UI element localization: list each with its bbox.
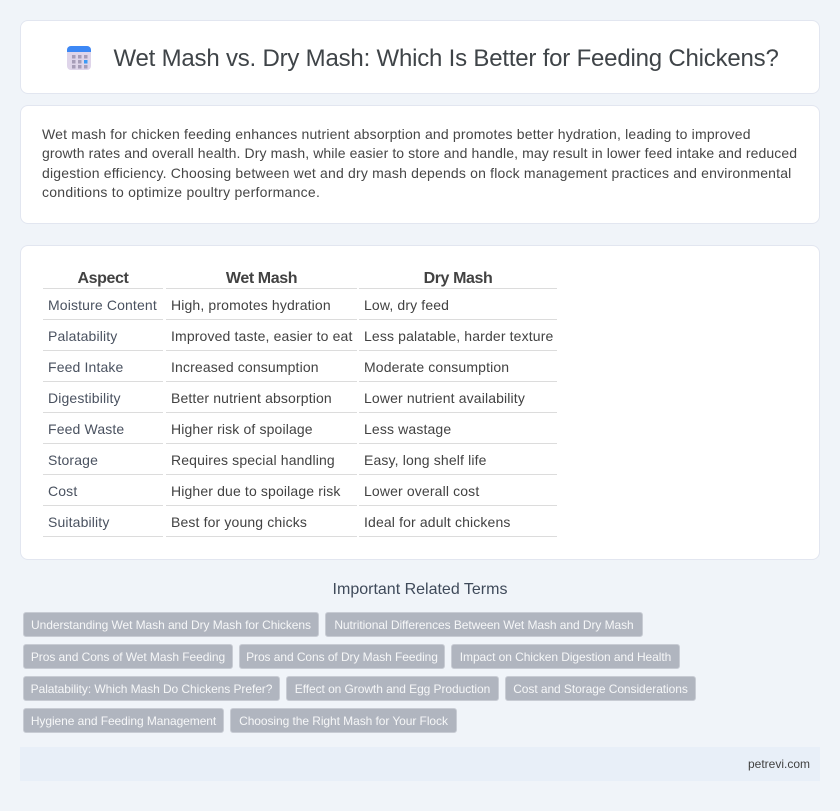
related terms tags: Palatability: Which Mash Do Chickens Prefer? (31, 682, 272, 696)
related terms tags (23, 612, 696, 733)
table rows: Low, dry feed (364, 297, 449, 313)
intro text (42, 126, 797, 200)
table rows: Requires special handling (171, 452, 335, 468)
related terms tags: Effect on Growth and Egg Production (295, 682, 490, 696)
related terms tags: Choosing the Right Mash for Your Flock (239, 714, 448, 728)
table rows: Less wastage (364, 421, 451, 437)
related terms tags: Nutritional Differences Between Wet Mash and Dry Mash (334, 618, 634, 632)
related terms tags: Cost and Storage Considerations (513, 682, 688, 696)
table header (43, 270, 557, 289)
table rows: Suitability (48, 514, 109, 530)
related terms tags: Pros and Cons of Dry Mash Feeding (246, 650, 438, 664)
table rows: Storage (48, 452, 98, 468)
panel: comparison table (20, 245, 820, 560)
table rows: Digestibility (48, 390, 121, 406)
table rows: Feed Intake (48, 359, 123, 375)
intro text: Wet mash for chicken feeding enhances nutrient absorption and promotes better hydration, leading to improved (42, 126, 751, 142)
header panel (20, 20, 820, 94)
footer bar (20, 747, 820, 781)
table header: Aspect (78, 270, 128, 287)
related terms tags: Hygiene and Feeding Management (31, 714, 216, 728)
intro text: growth rates and overall health. Dry mash, while easier to store and handle, may result in lower feed intake and reduced (42, 145, 797, 161)
table rows (43, 297, 557, 537)
table header: Dry Mash (424, 270, 492, 287)
table rows: Better nutrient absorption (171, 390, 332, 406)
table rows: Palatability (48, 328, 117, 344)
table rows: Moderate consumption (364, 359, 509, 375)
related terms tags: Pros and Cons of Wet Mash Feeding (31, 650, 225, 664)
title: Wet Mash vs. Dry Mash: Which Is Better for Feeding Chickens? (114, 45, 779, 72)
table rows: Feed Waste (48, 421, 124, 437)
icon: calendar (67, 46, 91, 70)
table rows: Less palatable, harder texture (364, 328, 553, 344)
table rows: Higher risk of spoilage (171, 421, 313, 437)
table rows: Ideal for adult chickens (364, 514, 511, 530)
footer source: petrevi.com (748, 757, 810, 771)
intro text: conditions to optimize poultry performance. (42, 184, 320, 200)
related terms tags: Impact on Chicken Digestion and Health (460, 650, 671, 664)
table rows: Best for young chicks (171, 514, 307, 530)
panel: introduction (20, 105, 820, 224)
table rows: Higher due to spoilage risk (171, 483, 341, 499)
table rows: Improved taste, easier to eat (171, 328, 352, 344)
comparison table (43, 270, 557, 537)
table rows: Increased consumption (171, 359, 319, 375)
related terms heading: Important Related Terms (333, 581, 507, 598)
table rows: Moisture Content (48, 297, 157, 313)
table rows: Lower overall cost (364, 483, 479, 499)
table rows: Easy, long shelf life (364, 452, 487, 468)
intro text: digestion efficiency. Choosing between wet and dry mash depends on flock management practices and environmental (42, 165, 791, 181)
table rows: Cost (48, 483, 77, 499)
related terms tags: Understanding Wet Mash and Dry Mash for Chickens (31, 618, 311, 632)
table header: Wet Mash (226, 270, 297, 287)
table rows: High, promotes hydration (171, 297, 331, 313)
table rows: Lower nutrient availability (364, 390, 525, 406)
